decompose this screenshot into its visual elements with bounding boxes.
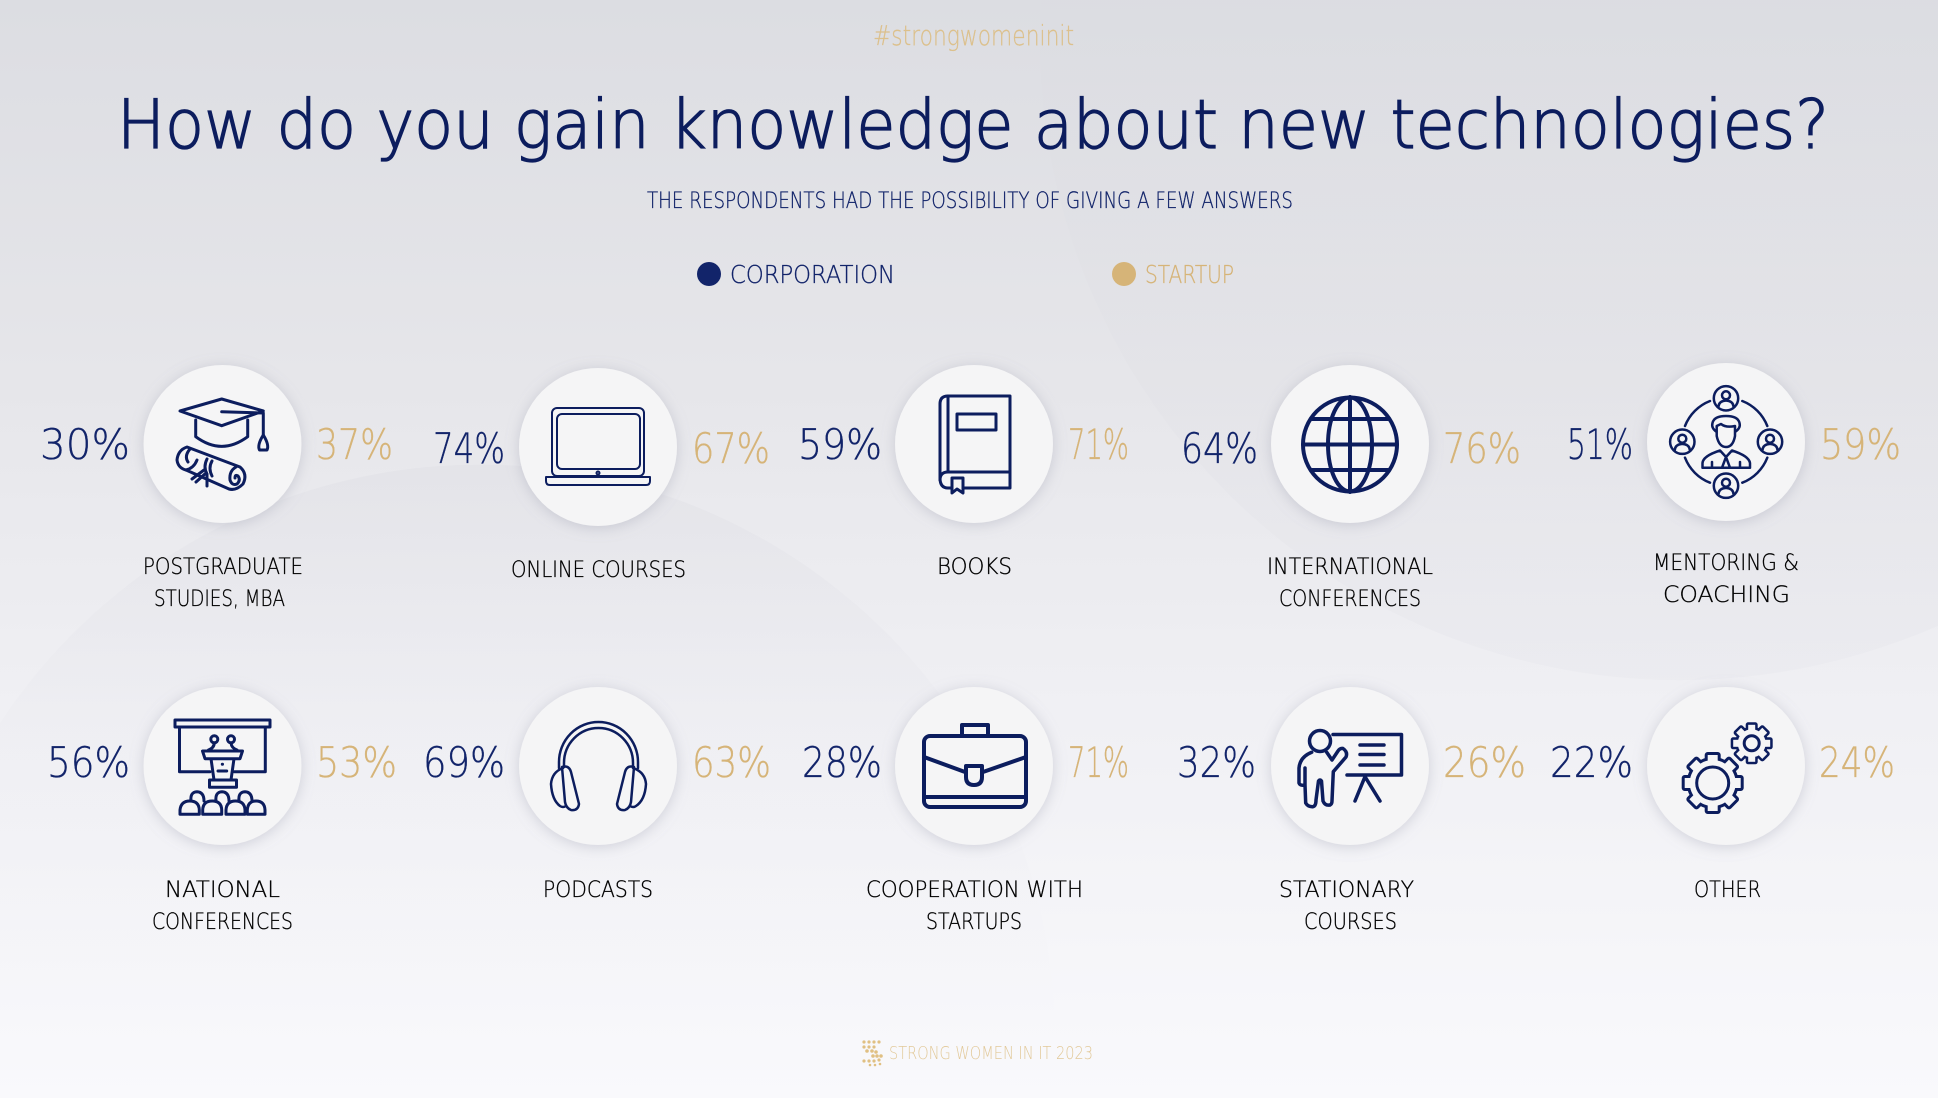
label: MENTORING & [1653,551,1799,576]
value: corporation 69%: 69% [423,738,505,787]
value: corporation 28%: 28% [802,738,882,787]
legend [697,260,1234,289]
value: startup 37%: 37% [316,420,393,469]
value: startup 63%: 63% [692,738,771,787]
label: OTHER [1694,878,1761,903]
label: ONLINE COURSES [511,558,686,583]
label [1653,551,1799,608]
subtitle: THE RESPONDENTS HAD THE POSSIBILITY OF GIVING A FEW ANSWERS [647,189,1293,214]
value: startup 71%: 71% [1068,420,1129,469]
icon: headphones [551,722,646,810]
label: BOOKS [937,555,1012,580]
panel: online courses [433,368,770,583]
panel: stationary courses [1177,687,1526,935]
label: STATIONARY [1279,878,1414,903]
icon: book [940,396,1010,493]
label: CONFERENCES [1279,587,1421,612]
label: COURSES [1304,910,1397,935]
panel: podcasts [423,687,771,903]
value: startup 53%: 53% [316,738,397,787]
panel: postgraduate studies [40,365,393,612]
value: corporation 59%: 59% [798,420,882,469]
label [143,555,303,612]
label [152,878,293,935]
icon: presenter at board [1299,730,1402,807]
label: COACHING [1663,583,1790,608]
panel: mentoring and coaching [1567,363,1901,608]
icon: graduation cap and diploma [177,399,268,489]
label [1267,555,1433,612]
label: INTERNATIONAL [1267,555,1433,580]
icon: globe [1303,397,1397,492]
icon: laptop [546,408,650,485]
panel: national conferences [47,687,397,935]
label: PODCASTS [543,878,653,903]
value: startup 67%: 67% [692,424,770,473]
value: corporation 74%: 74% [433,424,505,473]
panel: cooperation with startups [802,687,1129,935]
label: STUDIES, MBA [154,587,285,612]
value: startup 76%: 76% [1443,424,1521,473]
label: COOPERATION WITH [866,878,1083,903]
legend: corporation: CORPORATION [730,260,895,289]
legend: startup [1112,260,1234,289]
label: NATIONAL [165,878,280,903]
value: corporation 30%: 30% [40,420,130,469]
icon: footer logo [862,1040,883,1066]
value: startup 26%: 26% [1443,738,1526,787]
label [1279,878,1414,935]
label: STARTUPS [926,910,1022,935]
icon: gears [1685,725,1770,811]
value: startup 24%: 24% [1819,738,1895,787]
label: CONFERENCES [152,910,293,935]
icon: mentoring network [1670,386,1782,498]
label [866,878,1083,935]
hashtag: #strongwomeninit [873,19,1074,52]
panel: books [798,365,1129,580]
title: How do you gain knowledge about new technologies? [117,86,1829,165]
icon: large gear [1685,755,1741,811]
value: corporation 22%: 22% [1550,738,1633,787]
legend: startup: STARTUP [1145,260,1234,289]
icon: briefcase [924,725,1026,807]
icon: small gear [1733,725,1770,762]
icon: conference stage [175,720,270,814]
label: POSTGRADUATE [143,555,303,580]
footer [862,1040,1093,1066]
value: startup 59%: 59% [1820,420,1901,469]
value: corporation 56%: 56% [47,738,130,787]
panel: international conferences [1181,365,1521,612]
value: corporation 32%: 32% [1177,738,1256,787]
value: startup 71%: 71% [1068,738,1129,787]
value: corporation 51%: 51% [1567,420,1633,469]
panel: other [1550,687,1895,903]
footer text: STRONG WOMEN IN IT 2023 [889,1043,1093,1064]
value: corporation 64%: 64% [1181,424,1258,473]
